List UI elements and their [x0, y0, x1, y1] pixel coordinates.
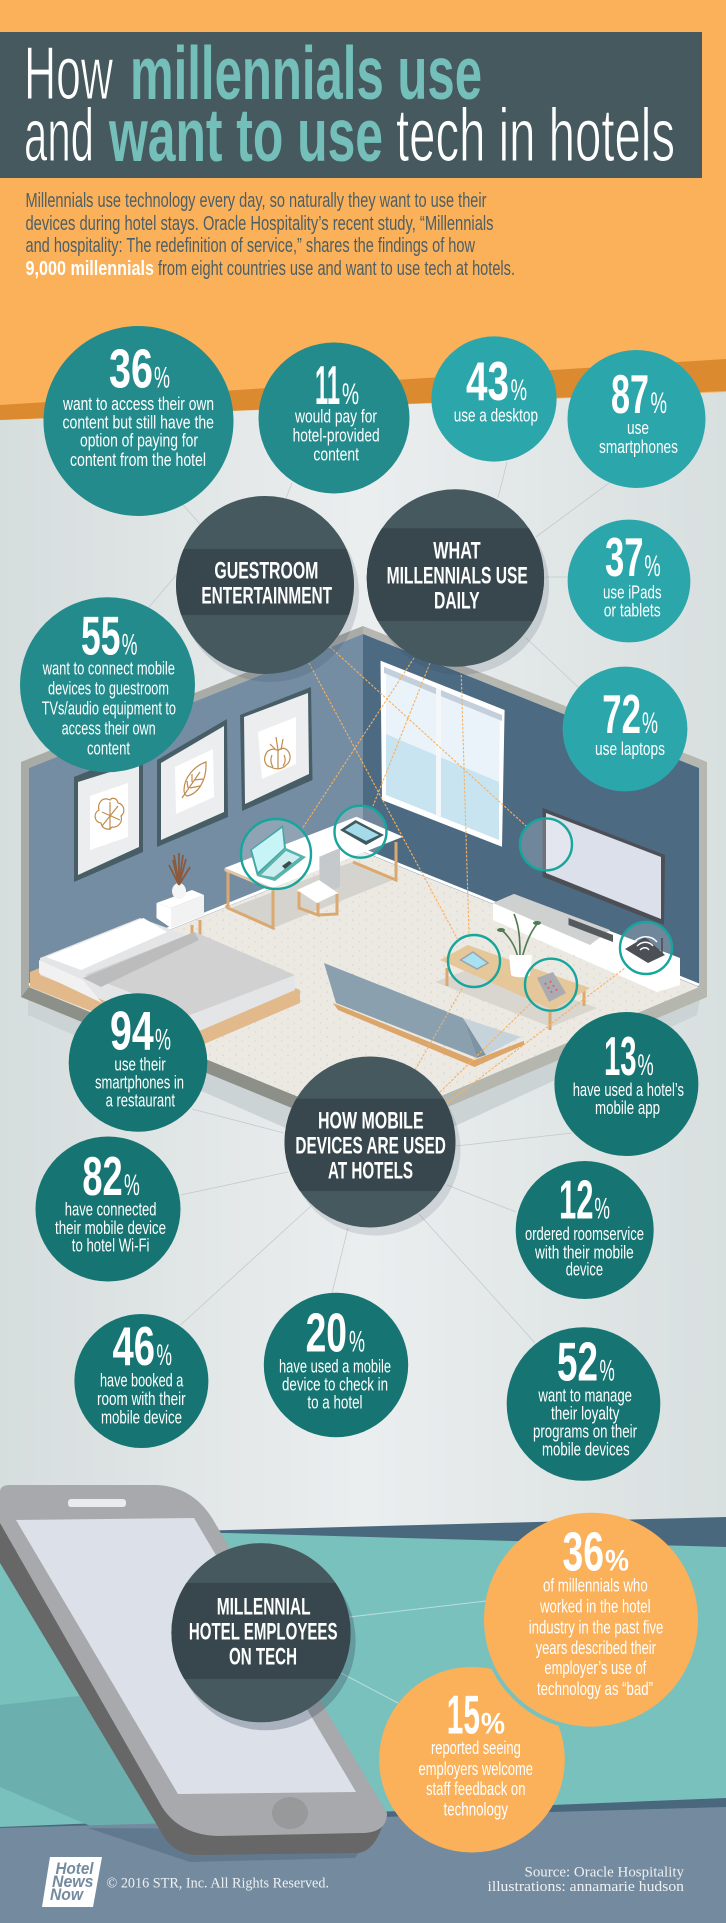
- intro text: and hospitality: The redefinition of service,” shares the findings of how: [26, 235, 475, 257]
- copyright: © 2016 STR, Inc. All Rights Reserved.: [106, 1876, 329, 1892]
- stat: 20%: have used a mobile: [279, 1357, 391, 1377]
- heading: guestroom entertainment: [170, 496, 360, 682]
- framed art: leaf: [157, 719, 228, 847]
- stat: 12%: [516, 1161, 654, 1299]
- stat: 36% employers: employer’s use of: [544, 1658, 647, 1678]
- title band: and: [24, 94, 94, 178]
- stat: 82%: 82: [82, 1145, 123, 1207]
- stat: 36% employers: [484, 1513, 698, 1727]
- heading: guestroom entertainment: ENTERTAINMENT: [201, 582, 332, 609]
- device: smartphone: [461, 952, 488, 969]
- stat: 20%: %: [349, 1326, 365, 1359]
- stat: 36% content: 36: [109, 338, 153, 400]
- stat: 36% content: option of paying for: [80, 431, 198, 451]
- stat: 46%: 46: [112, 1315, 155, 1377]
- stat: 36% content: content but still have the: [62, 413, 214, 433]
- device: tablet: [340, 820, 384, 845]
- stat: 72%: %: [642, 707, 658, 740]
- intro text: 9,000 millennials: [26, 258, 154, 280]
- stat: 13%: 13: [604, 1025, 637, 1087]
- stat: 15% employers: staff feedback on: [426, 1779, 526, 1799]
- stat: 13%: mobile app: [595, 1098, 660, 1118]
- stat: 55%: 55: [81, 604, 120, 666]
- stat: 15% employers: technology: [444, 1800, 508, 1820]
- stat: 46%: have booked a: [100, 1371, 184, 1391]
- stat: 36% employers: of millennials who: [543, 1576, 648, 1596]
- stat: 20%: to a hotel: [307, 1393, 362, 1413]
- stat: 46%: mobile device: [101, 1407, 182, 1427]
- stat: 20%: [264, 1293, 408, 1437]
- stat: 11%: [258, 342, 410, 494]
- stat: 15% employers: [379, 1666, 565, 1852]
- heading: how mobile devices are used at hotels: AT HOTELS: [328, 1157, 413, 1184]
- stat: 46%: room with their: [97, 1389, 186, 1409]
- stat: 82%: %: [124, 1169, 140, 1202]
- room floor shadow: [28, 1000, 700, 1165]
- stat: 55%: devices to guestroom: [48, 678, 169, 698]
- stat: 55%: TVs/audio equipment to: [42, 698, 176, 718]
- stat: 52%: 52: [557, 1331, 598, 1393]
- logo: Hotel News Now: [42, 1857, 102, 1907]
- logo: Hotel News Now: Now: [50, 1885, 85, 1904]
- stat: 87%: 87: [611, 363, 649, 425]
- desk: [224, 817, 403, 928]
- heading: millennial hotel employees on tech: [165, 1543, 356, 1730]
- smartphone illustration: [0, 1485, 387, 1855]
- stat: 94%: %: [155, 1023, 171, 1056]
- title band: [0, 32, 702, 178]
- stat: 11%: %: [342, 378, 359, 411]
- stat: 52%: programs on their: [533, 1421, 637, 1441]
- stat: 37%: 37: [605, 526, 644, 588]
- stat: 55%: want to connect mobile: [42, 658, 175, 678]
- stat: 37%: or tablets: [604, 601, 661, 621]
- source credit: Source: Oracle Hospitality: [524, 1865, 685, 1881]
- right wall: [363, 634, 699, 987]
- nightstand: [156, 890, 204, 946]
- phone body: [0, 1485, 387, 1836]
- background: orange header: [0, 0, 726, 420]
- stat: 46%: %: [156, 1339, 172, 1372]
- heading: millennial hotel employees on tech: MILLENNIAL: [217, 1593, 311, 1620]
- heading: what millennials use daily: DAILY: [434, 587, 480, 614]
- stat: 36% content: content from the hotel: [70, 450, 206, 470]
- stat: 36% employers: technology as “bad”: [537, 1679, 653, 1699]
- stat: 20%: device to check in: [282, 1375, 388, 1395]
- stat: 52%: %: [600, 1355, 615, 1388]
- heading: what millennials use daily: WHAT: [433, 537, 481, 564]
- stat: 12%: device: [566, 1260, 603, 1280]
- stat: 55%: [20, 597, 195, 772]
- stat: 11%: hotel-provided: [293, 426, 380, 446]
- highlight rings: [241, 806, 672, 1011]
- stat: 12%: 12: [559, 1168, 594, 1230]
- left wall: [29, 634, 363, 987]
- heading: what millennials use daily: MILLENNIALS USE: [387, 562, 528, 589]
- stat: 11%: content: [313, 445, 359, 465]
- stat: 82%: [36, 1136, 180, 1282]
- source credit: [488, 1865, 685, 1895]
- connector lines: [149, 462, 625, 1343]
- heading: how mobile devices are used at hotels: HOW MOBILE: [318, 1107, 424, 1134]
- stat: 15% employers: 15: [447, 1683, 480, 1745]
- stat: 13%: have used a hotel’s: [573, 1080, 684, 1100]
- employee connectors: [341, 1601, 486, 1703]
- stat: 55%: %: [122, 628, 138, 661]
- bottom band and floor: [0, 1517, 726, 1923]
- stat: 87%: [568, 350, 706, 488]
- stat: 36% employers: worked in the hotel: [539, 1597, 650, 1617]
- intro text: devices during hotel stays. Oracle Hospitality’s recent study, “Millennials: [26, 213, 494, 235]
- stat: 43%: use a desktop: [454, 406, 538, 426]
- stat: 94%: 94: [110, 999, 154, 1061]
- title band: millennials use: [130, 32, 482, 116]
- device: hotel remote: [537, 972, 566, 1002]
- stat: 36% employers: 36: [562, 1521, 604, 1583]
- stat: 46%: [74, 1314, 208, 1448]
- chair: [297, 848, 340, 915]
- stat: 72%: use laptops: [595, 739, 665, 759]
- stat: 87%: %: [650, 387, 667, 420]
- stat: 12%: with their mobile: [534, 1242, 634, 1262]
- stat: 43%: [431, 336, 557, 462]
- stat: 94%: smartphones in: [95, 1072, 184, 1092]
- stat: 72%: [563, 667, 687, 791]
- stat: 12%: ordered roomservice: [525, 1224, 644, 1244]
- coffee table: [435, 945, 597, 1030]
- phone speaker: [68, 1499, 126, 1507]
- stat: 43%: %: [511, 374, 527, 407]
- intro text: [26, 190, 515, 280]
- stat: 43%: 43: [466, 350, 509, 412]
- phone screen: [16, 1518, 356, 1794]
- stat: 37%: use iPads: [603, 583, 662, 603]
- framed art: flower: [74, 749, 143, 882]
- stat: 55%: access their own: [62, 718, 156, 738]
- tv console: [493, 894, 680, 992]
- phone side: [0, 1523, 387, 1855]
- stat: 13%: %: [638, 1049, 654, 1082]
- device: laptop: [250, 825, 306, 881]
- stat: 82%: to hotel Wi-Fi: [72, 1236, 150, 1256]
- stat: 36% content: [44, 326, 234, 516]
- room rim: [21, 626, 707, 1140]
- tv screen: [543, 808, 665, 925]
- stat: 36% employers: years described their: [536, 1638, 656, 1658]
- stat: 15% employers: reported seeing: [431, 1738, 521, 1758]
- framed art: tulip: [240, 687, 312, 811]
- stat: 82%: their mobile device: [55, 1218, 166, 1238]
- intro text: from eight countries use and want to use tech at hotels.: [158, 258, 515, 280]
- stat: 87%: smartphones: [599, 437, 678, 457]
- baseboard: [29, 850, 699, 985]
- stat: 13%: [554, 1012, 698, 1156]
- stat: 52%: mobile devices: [542, 1439, 630, 1459]
- heading: millennial hotel employees on tech: HOTEL EMPLOYEES: [189, 1618, 338, 1645]
- heading: what millennials use daily: [360, 489, 550, 675]
- heading: guestroom entertainment: GUESTROOM: [214, 557, 318, 584]
- intro text: Millennials use technology every day, so naturally they want to use their: [26, 190, 487, 212]
- stat: 94%: a restaurant: [106, 1091, 175, 1111]
- stat: 52%: [507, 1327, 660, 1481]
- logo: Hotel News Now: Hotel: [56, 1859, 95, 1878]
- stat: 15% employers: %: [481, 1707, 505, 1740]
- stat: 37%: %: [644, 550, 661, 583]
- stat: 94%: use their: [114, 1055, 166, 1075]
- stat: 52%: their loyalty: [551, 1403, 619, 1423]
- stat: 36% content: %: [154, 362, 170, 395]
- stat: 52%: want to manage: [538, 1386, 632, 1406]
- stat: 15% employers: employers welcome: [418, 1759, 533, 1779]
- carpet floor: [29, 852, 699, 1126]
- heading: how mobile devices are used at hotels: DEVICES ARE USED: [295, 1132, 446, 1159]
- logo: Hotel News Now: News: [52, 1872, 94, 1891]
- title band: want to use: [108, 94, 383, 178]
- device: tablet screen: [345, 823, 379, 841]
- bed: [30, 918, 300, 1050]
- stat: 36% employers: industry in the past five: [529, 1617, 663, 1637]
- stat: 20%: 20: [306, 1302, 347, 1364]
- plant: [497, 914, 541, 977]
- stat: 72%: 72: [602, 683, 641, 745]
- device: router: [625, 937, 665, 963]
- stat: 55%: content: [87, 738, 130, 758]
- stat: 12%: %: [594, 1192, 610, 1225]
- heading: millennial hotel employees on tech: ON TECH: [229, 1643, 297, 1670]
- stat: 36% employers: %: [605, 1545, 629, 1578]
- highlight ring fills: [241, 806, 672, 974]
- stat: 87%: use: [627, 418, 649, 438]
- source credit: illustrations: annamarie hudson: [488, 1879, 685, 1895]
- stat: 37%: [568, 520, 690, 642]
- background: wall: [0, 380, 726, 1580]
- stat: 94%: [69, 993, 207, 1132]
- window: [380, 661, 505, 847]
- phone home button: [272, 1797, 308, 1829]
- stat: 82%: have connected: [65, 1200, 156, 1220]
- sofa: [324, 963, 524, 1067]
- stat: 11%: 11: [315, 354, 340, 416]
- heading: how mobile devices are used at hotels: [280, 1056, 460, 1236]
- stat: 11%: would pay for: [294, 407, 377, 427]
- vase with flowers: [169, 853, 190, 899]
- stat: 36% content: want to access their own: [62, 394, 214, 414]
- title band: How: [24, 32, 113, 116]
- hotel room illustration: [21, 626, 707, 1165]
